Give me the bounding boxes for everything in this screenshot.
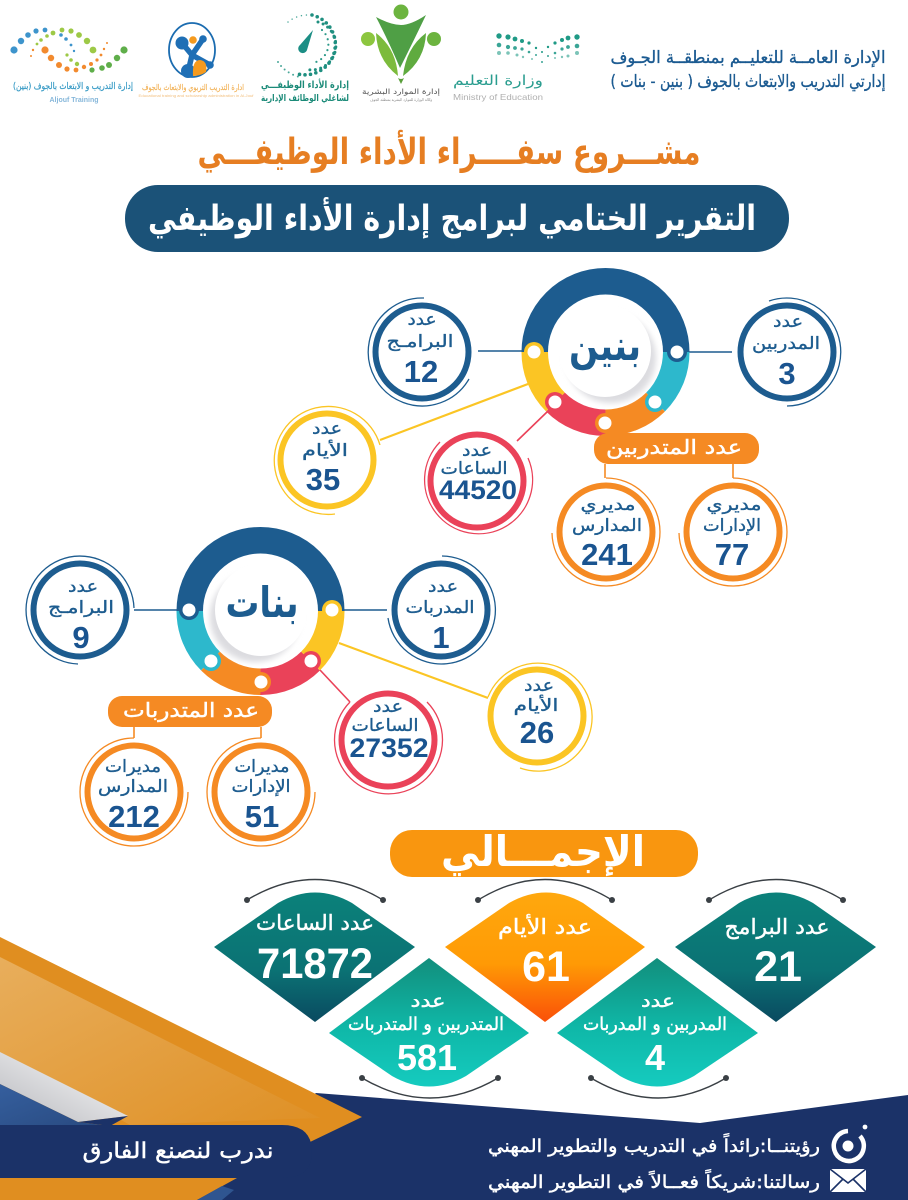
- logo: Al-Jouf training: إدارة التدريب و الابتعاث بالجوف (بنين): [13, 82, 133, 92]
- pill: girls trainees: عدد المتدربات: [123, 698, 259, 722]
- diamond: total programs: عدد البرامج: [724, 915, 830, 939]
- stat: school principals 212: [80, 738, 188, 846]
- stat: girls days 26: 26: [520, 715, 554, 750]
- slogan pill: [0, 1125, 312, 1178]
- logo: ministry of education: وزارة التعليم: [453, 73, 543, 89]
- stat: department managers 51: [207, 738, 315, 846]
- stat: school principals 241: المدارس: [572, 516, 642, 536]
- stat: boys programs 12: 12: [404, 354, 438, 389]
- stat: girls days 26: الأيام: [514, 695, 558, 716]
- donut: girls: [179, 540, 342, 692]
- stat: boys programs 12: البرامـج: [386, 332, 454, 352]
- stat: girls days 26: [488, 663, 592, 771]
- stat: department managers 77: مديري: [706, 495, 762, 515]
- diamond: total hours: [214, 892, 415, 1022]
- stat: boys hours 44520: عدد: [462, 441, 492, 461]
- stat: boys hours 44520: [425, 434, 533, 534]
- stat: department managers 77: الإدارات: [703, 516, 761, 536]
- report banner: التقرير الختامي لبرامج إدارة الأداء الوظيفي: [148, 196, 756, 239]
- panel: boys connectors: [380, 351, 733, 478]
- logo: Al-Jouf training: [10, 28, 133, 104]
- diamond: total trainees: 581: [397, 1037, 457, 1078]
- stat: girls trainers 1: عدد: [428, 577, 458, 597]
- logo: ministry of education: [453, 33, 580, 102]
- stat: boys trainers 3: [740, 298, 841, 406]
- diamond: total trainers: [557, 958, 758, 1086]
- stat: boys days 35: [274, 406, 380, 514]
- diamond: total trainees: [329, 958, 529, 1086]
- vision line: رؤيتنــا:رائداً في التدريب والتطوير المهني: [488, 1133, 820, 1157]
- panel: girls connectors: [134, 610, 488, 738]
- stat: boys hours 44520: الساعات: [440, 459, 508, 479]
- stat: boys hours 44520: 44520: [439, 475, 517, 505]
- diamond: total days: عدد الأيام: [498, 914, 592, 939]
- stat: department managers 51: مديرات: [234, 757, 290, 777]
- logo: performance management: إدارة الأداء الوظيفـــي: [261, 78, 349, 91]
- pill: boys trainees: عدد المتدربين: [606, 435, 742, 459]
- pill: girls trainees: [108, 696, 272, 727]
- stat: girls trainers 1: 1: [432, 620, 450, 655]
- diamond: total trainers: المدربين و المدربات: [583, 1014, 727, 1035]
- stat: boys trainers 3: عدد: [773, 312, 803, 332]
- stat: boys days 35: عدد: [312, 419, 342, 439]
- stat: school principals 241: [552, 478, 660, 586]
- report banner: [125, 185, 789, 252]
- stat: girls trainers 1: [388, 556, 495, 664]
- vision line: [488, 1125, 867, 1161]
- organisation heading: الإدارة العامــة للتعليــم بمنطقــة الجـوف: [610, 48, 886, 68]
- girls label: بنات: [226, 578, 298, 627]
- stat: school principals 212: مديرات: [105, 757, 161, 777]
- diamond: total hours: 71872: [257, 940, 373, 988]
- donut: boys: [524, 281, 687, 433]
- stat: girls days 26: عدد: [524, 676, 554, 696]
- diamond: total trainers: 4: [645, 1037, 665, 1078]
- footer background shapes: [0, 937, 908, 1200]
- stat: girls hours 27352: الساعات: [352, 716, 418, 736]
- logo: ministry of education: Ministry of Education: [453, 92, 543, 102]
- mission line: رسالتنا:شريكاً فعــالاً في التطوير المهني: [488, 1169, 820, 1193]
- diamond: total days: [445, 892, 645, 1022]
- diamond: total days: 61: [522, 943, 570, 991]
- stat: girls programs 9: عدد: [68, 577, 98, 597]
- stat: girls programs 9: [26, 556, 134, 664]
- stat: department managers 51: 51: [245, 799, 279, 834]
- diamond: total trainees: المتدربين و المتدربات: [348, 1014, 504, 1035]
- icon: envelope: [830, 1169, 866, 1192]
- logo: performance management: لشاغلي الوظائف الإدارية: [261, 94, 349, 104]
- stat: department managers 77: 77: [715, 537, 749, 572]
- logo: human resources: وكالة الوزارة للموارد البشرية بمنطقة الجوف: [370, 97, 432, 102]
- stat: boys trainers 3: المدربين: [752, 334, 820, 354]
- organisation heading: [610, 48, 886, 92]
- logo: human resources: [361, 4, 441, 102]
- total heading: الإجمـــالي: [441, 827, 645, 877]
- stat: girls hours 27352: 27352: [350, 733, 428, 763]
- stat: school principals 241: 241: [581, 537, 633, 572]
- stat: department managers 77: [679, 478, 787, 586]
- diamond: total trainers: عدد: [641, 991, 675, 1012]
- stat: school principals 212: المدارس: [98, 777, 168, 797]
- boys label: بنين: [569, 321, 641, 371]
- logo: educational training: Educational training and scholarship administration in Al-Jouf: [138, 94, 254, 98]
- icon: target: [834, 1125, 867, 1161]
- pill: boys trainees: [594, 433, 759, 464]
- stat: girls programs 9: 9: [72, 620, 90, 655]
- stat: boys days 35: 35: [306, 462, 340, 497]
- diamond: total hours: عدد الساعات: [256, 911, 374, 935]
- stat: department managers 51: الإدارات: [232, 777, 290, 797]
- logo: educational training: ادارة التدريب التربوي والابتعاث بالجوف: [142, 83, 244, 92]
- stat: boys programs 12: عدد: [408, 310, 436, 330]
- logo: human resources: إدارة الموارد البشرية: [362, 87, 440, 96]
- stat: boys trainers 3: 3: [778, 356, 796, 391]
- stat: boys days 35: الأيام: [302, 440, 348, 461]
- diamond: total programs: [675, 892, 876, 1022]
- diamond: total trainees: عدد: [410, 991, 446, 1012]
- stat: girls hours 27352: عدد: [373, 697, 403, 717]
- mission line: [488, 1169, 866, 1193]
- decorative arcs around diamonds: [244, 880, 846, 1098]
- stat: school principals 241: مديري: [580, 495, 636, 515]
- stat: girls programs 9: البرامـج: [48, 598, 114, 618]
- diamond: total programs: 21: [754, 943, 802, 991]
- logo: Al-Jouf training: Aljouf Training: [50, 97, 98, 104]
- stat: boys programs 12: [368, 298, 469, 406]
- stat: girls trainers 1: المدربات: [406, 598, 474, 618]
- stat: school principals 212: 212: [108, 799, 160, 834]
- slogan pill: ندرب لنصنع الفارق: [82, 1139, 274, 1164]
- stat: girls hours 27352: [334, 694, 443, 794]
- title: مشـــروع سفــــراء الأداء الوظيفـــي: [198, 129, 700, 173]
- logo: educational training: [138, 23, 254, 98]
- logo: performance management: [261, 15, 349, 104]
